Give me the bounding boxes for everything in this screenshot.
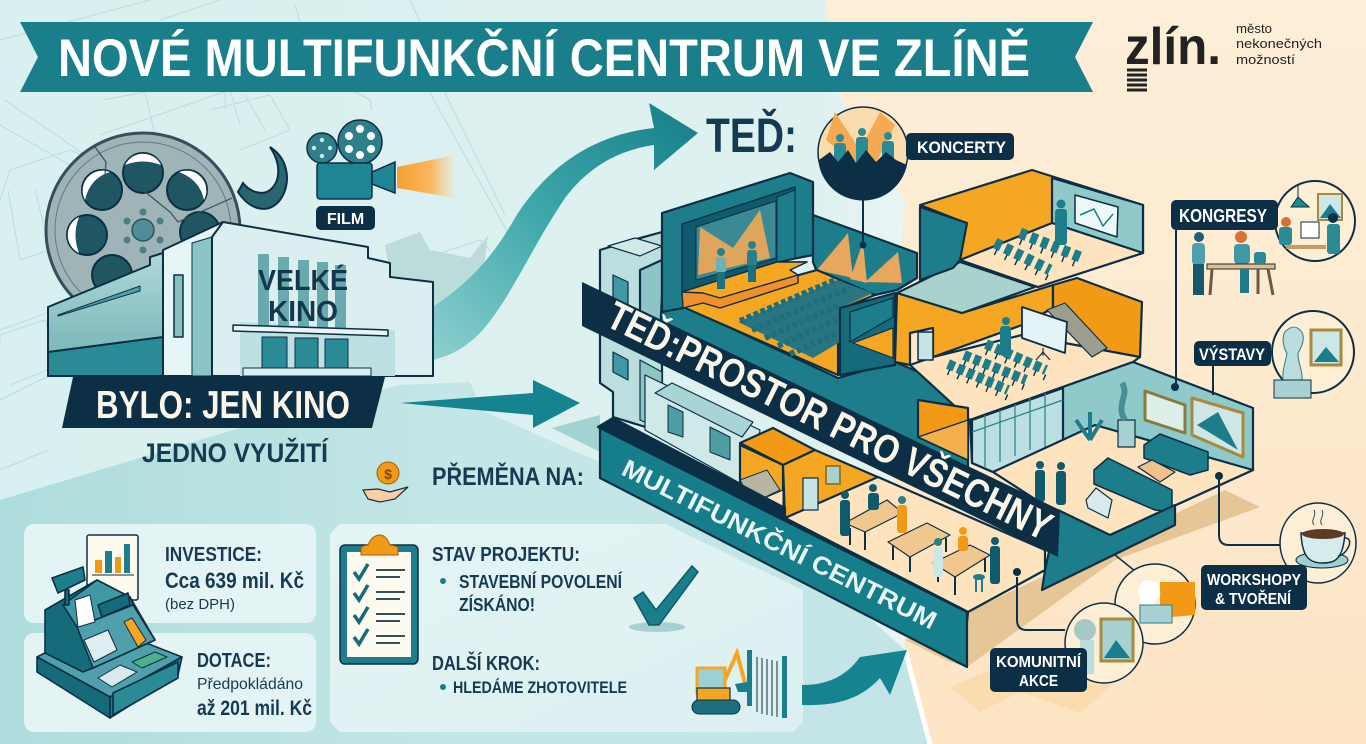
building sign	[258, 263, 348, 328]
arrow: kino to film path	[400, 380, 580, 428]
icon: cash register	[37, 535, 182, 718]
building sign: KINO	[268, 296, 338, 328]
title banner: NOVÉ MULTIFUNKČNÍ CENTRUM VE ZLÍNĚ	[58, 27, 1030, 88]
entrance facade	[600, 232, 760, 490]
panel: investice: Cca 639 mil. Kč	[165, 568, 304, 593]
label: komunitní akce: AKCE	[1019, 673, 1058, 690]
logo: zlin: město	[1236, 22, 1272, 36]
label: kongresy: KONGRESY	[1179, 206, 1267, 226]
audience seats	[738, 280, 873, 358]
presentation room	[895, 262, 1142, 420]
panel: stav projektu: HLEDÁME ZHOTOVITELE	[453, 678, 627, 697]
icon: workshop people	[1192, 231, 1275, 295]
logo: zlin: možností	[1236, 53, 1296, 67]
icon: congress circle	[1275, 181, 1355, 261]
panel: dotace: Předpokládáno	[197, 676, 303, 693]
label: komunitní akce	[990, 648, 1087, 692]
icon: creative circle	[1115, 555, 1195, 644]
label: workshopy: & TVOŘENÍ	[1215, 589, 1291, 608]
panel: stav projektu: DALŠÍ KROK:	[432, 651, 540, 675]
icon: exhibition circle	[1272, 311, 1354, 398]
building sign: VELKÉ	[258, 263, 348, 297]
label: workshopy: WORKSHOPY	[1207, 572, 1301, 589]
base: navy strip	[598, 418, 968, 622]
icon: excavator and gate	[692, 650, 787, 718]
panel: investice	[24, 524, 316, 623]
icon: hand with coin: $	[384, 466, 392, 482]
icon: community circle	[1013, 568, 1143, 683]
band text: prostor: TEĎ:PROSTOR PRO VŠECHNY	[600, 292, 1060, 550]
label: výstavy	[1194, 341, 1271, 395]
panel: dotace	[24, 633, 316, 732]
icon: concert circle	[818, 107, 908, 248]
building: Velké kino	[48, 222, 433, 376]
label: FILM	[316, 206, 375, 230]
icon: check mark	[629, 566, 698, 632]
label: kongresy	[1171, 200, 1278, 391]
panel: dotace: až 201 mil. Kč	[197, 697, 312, 720]
logo: zlin: nekonečných	[1236, 37, 1322, 51]
label: workshopy	[1201, 565, 1307, 610]
gallery room	[970, 362, 1253, 535]
text: přeměna na: PŘEMĚNA NA:	[432, 461, 584, 491]
icon: coffee circle	[1215, 472, 1356, 583]
congress room	[920, 170, 1143, 287]
icon: hand with coin	[363, 462, 408, 502]
banner: Bylo jen kino: BYLO: JEN KINO	[96, 384, 350, 427]
icon: clipboard	[340, 535, 418, 664]
panel: stav projektu: STAV PROJEKTU:	[432, 544, 580, 566]
teal slab under concert hall	[660, 296, 968, 480]
logo: zlin	[1125, 18, 1322, 90]
base: teal plinth	[600, 428, 967, 667]
panel: dotace: DOTACE:	[197, 650, 271, 672]
panel: investice: INVESTICE:	[165, 544, 262, 566]
orange accent block	[918, 400, 968, 460]
icon: film camera	[307, 120, 455, 199]
band: prostor pro všechny	[582, 282, 1060, 557]
panel: stav projektu: ZÍSKÁNO!	[459, 594, 535, 615]
multifunctional building	[582, 170, 1253, 667]
label: koncerty: KONCERTY	[917, 138, 1007, 157]
gallery pillars	[1042, 505, 1175, 590]
heading: teď: TEĎ:	[706, 108, 797, 163]
workshop room	[740, 428, 1045, 612]
musicians	[716, 241, 757, 289]
panel: stav projektu: STAVEBNÍ POVOLENÍ	[459, 571, 623, 592]
label: komunitní akce: KOMUNITNÍ	[996, 652, 1082, 671]
band text: centrum: MULTIFUNKČNÍ CENTRUM	[617, 453, 942, 635]
icon: cracked film reel	[46, 133, 287, 327]
arrow: swoosh to teď	[433, 103, 698, 360]
label: FILM: FILM	[327, 211, 364, 228]
panel: stav projektu	[330, 524, 803, 732]
concert hall	[662, 173, 917, 375]
label: koncerty	[906, 133, 1014, 160]
logo: zlin: zlín.	[1125, 18, 1221, 76]
label: výstavy: VÝSTAVY	[1199, 345, 1266, 364]
arrow: project to building	[802, 650, 907, 705]
text: jedno využití: JEDNO VYUŽITÍ	[142, 437, 329, 468]
blueprint sketch lines	[0, 0, 508, 470]
panel: investice: (bez DPH)	[165, 596, 235, 613]
